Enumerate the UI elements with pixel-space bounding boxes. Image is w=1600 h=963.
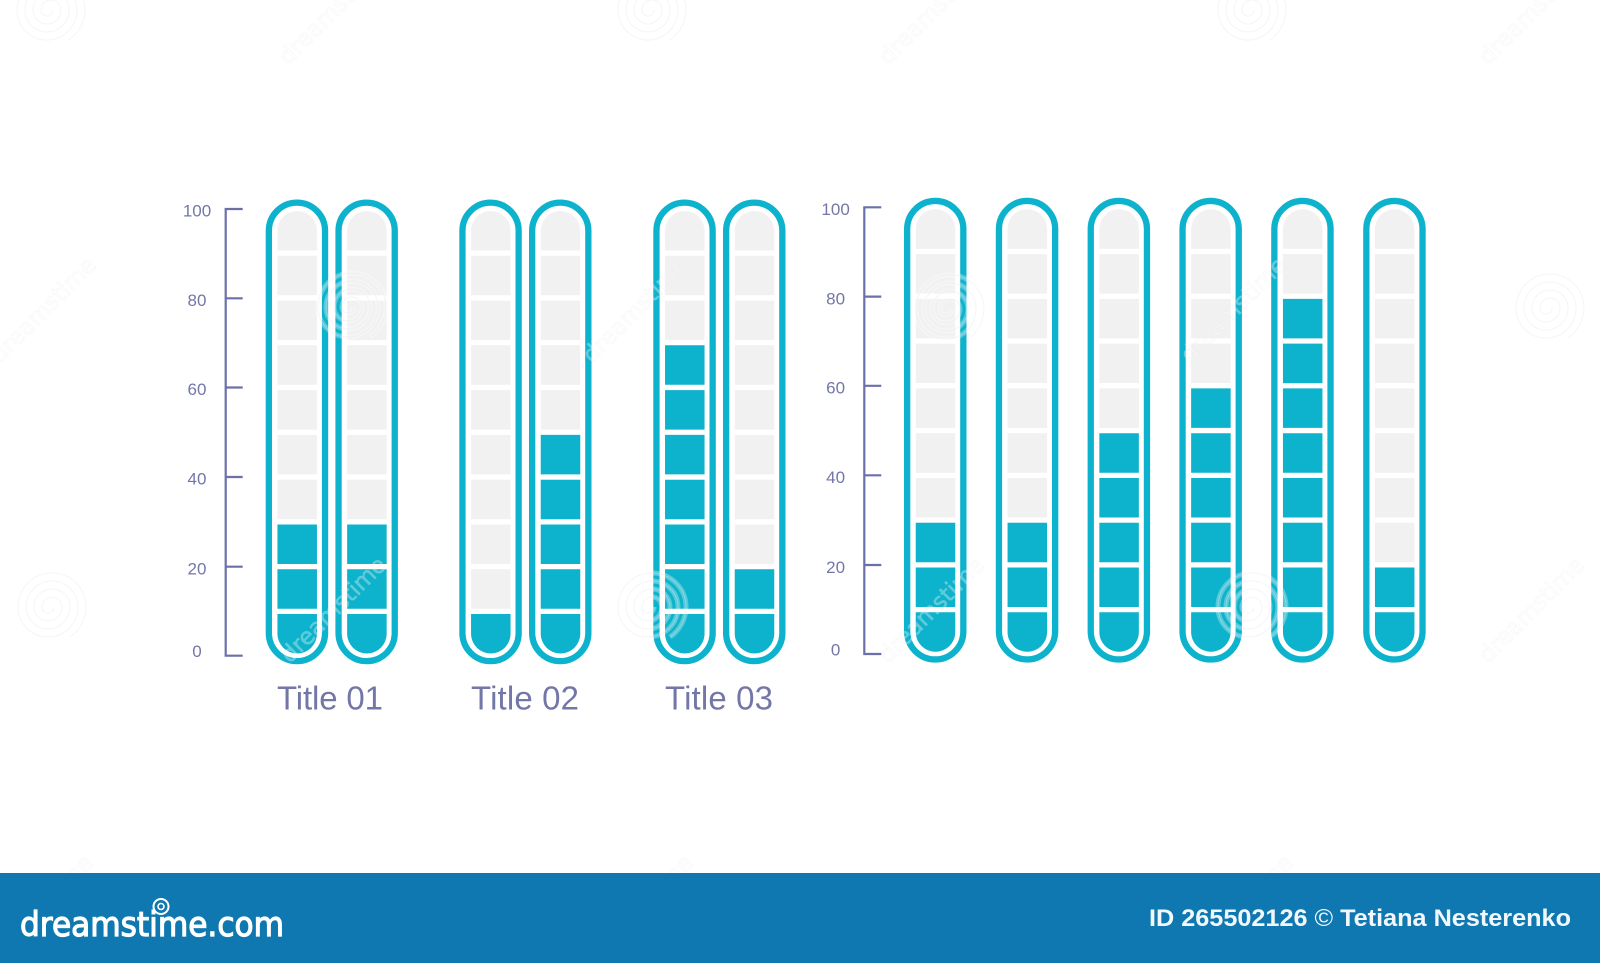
tube: Title 02 second bar, value 50 <box>532 203 588 661</box>
y axis: left chart: 40 <box>188 470 206 488</box>
y axis: right chart <box>821 200 881 659</box>
logo: dreamstime.com: dreamstime.com <box>20 905 284 945</box>
tube: right chart bar 4, value 60 <box>1183 201 1239 659</box>
watermark spirals and diagonal text: dreamstime <box>1474 552 1590 668</box>
tube: right chart bar 3, value 50 <box>1091 201 1147 659</box>
panel: left grouped chart <box>183 202 782 716</box>
y axis: left chart: 100 <box>183 202 211 220</box>
label: Title 01: Title 01 <box>277 679 383 716</box>
credit text: ID 265502126 © Tetiana Nesterenko <box>1149 905 1571 932</box>
panel: right chart <box>821 200 1423 659</box>
y axis: left chart: 20 <box>188 560 206 578</box>
y axis: right chart: 40 <box>826 468 845 487</box>
y axis: right chart: 0 <box>831 640 840 659</box>
tube: right chart bar 2, value 30 <box>999 201 1055 659</box>
tube: Title 02 first bar, value 10 <box>462 203 519 661</box>
watermark spirals and diagonal text: dreamstime <box>583 850 699 963</box>
watermark spirals and diagonal text: dreamstime <box>276 552 392 668</box>
tube: Title 03 first bar, value 70 <box>656 203 713 661</box>
label: Title 02: Title 02 <box>471 679 579 716</box>
y axis: left chart: 80 <box>188 291 206 310</box>
tube: right chart bar 1, value 30 <box>907 201 963 659</box>
tube: Title 01 first bar, value 30 <box>269 203 325 661</box>
label: Title 03: Title 03 <box>665 679 773 716</box>
y axis: right chart: 20 <box>826 558 845 577</box>
watermark spirals and diagonal text: dreamstime <box>874 552 990 668</box>
footer banner <box>0 873 1600 963</box>
watermark spirals and diagonal text: dreamstime <box>1183 850 1299 963</box>
tube: Title 01 second bar, value 30 <box>339 203 395 661</box>
y axis: left chart: 0 <box>192 642 202 661</box>
tube: Title 03 second bar, value 20 <box>726 203 782 661</box>
y axis: right chart: 60 <box>826 378 845 397</box>
y axis: left chart: 60 <box>188 380 206 399</box>
y axis: right chart: 100 <box>821 200 850 219</box>
y axis: right chart: 80 <box>826 289 845 308</box>
watermark spirals and diagonal text: dreamstime <box>1176 252 1292 368</box>
y axis: left chart <box>183 202 243 661</box>
watermark spirals and diagonal text: dreamstime <box>578 252 694 368</box>
tube: right chart bar 5, value 80 <box>1274 201 1331 659</box>
tube: right chart bar 6, value 20 <box>1366 201 1423 659</box>
